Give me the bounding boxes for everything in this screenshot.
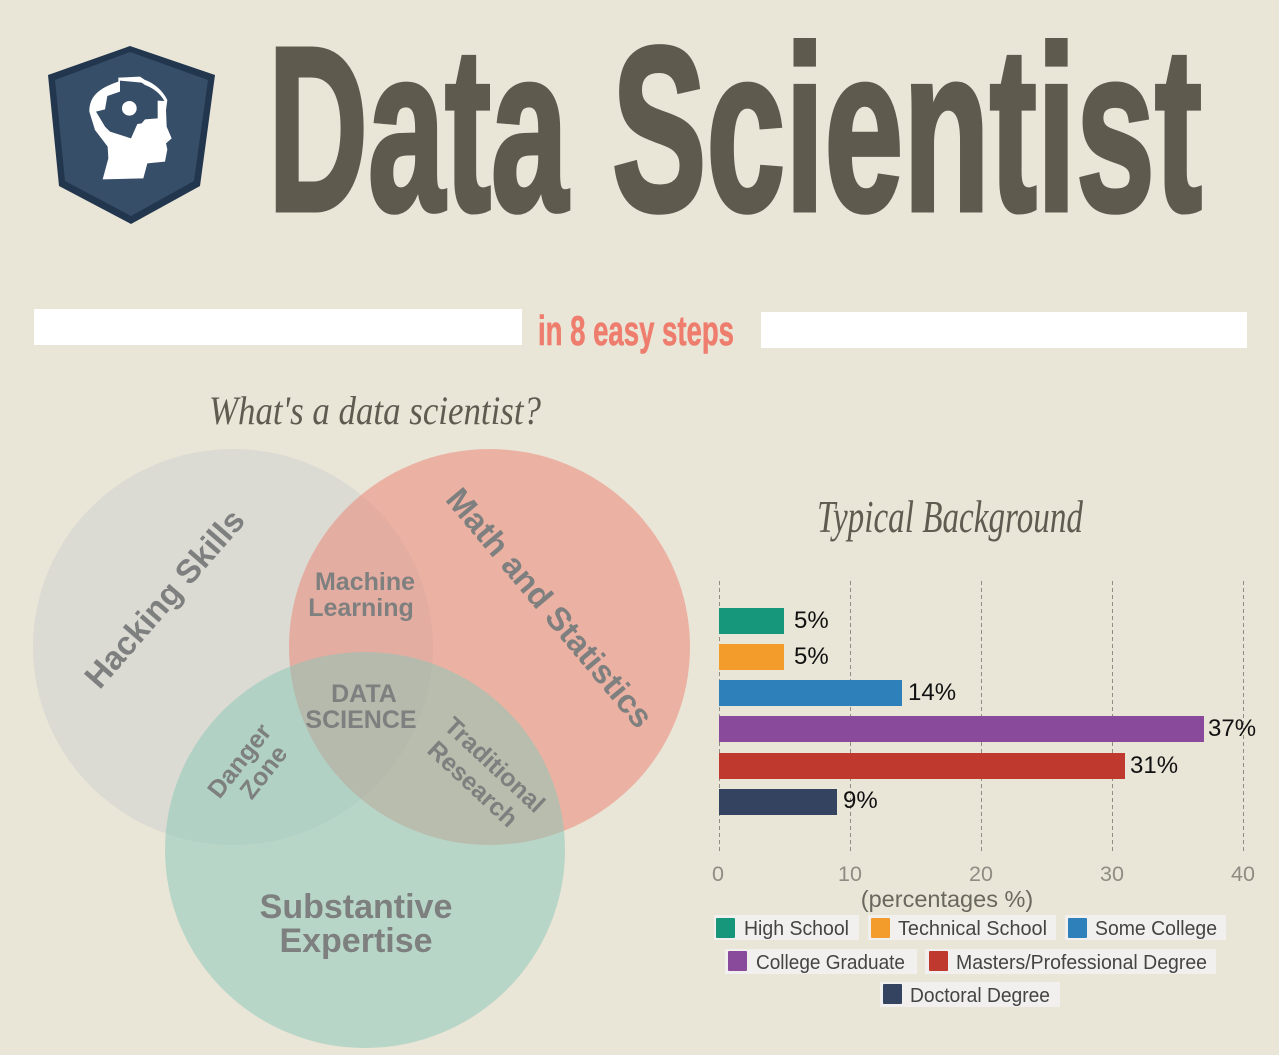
title word: Data: Data [268,0,569,260]
axis ticks: 10 [838,862,862,886]
bar: technical school: 5% [794,643,829,670]
icon: shield with head and gear [48,46,215,224]
axis ticks: 20 [969,862,993,886]
circle: substantive expertise [165,652,565,1048]
heading: typical background: Typical Background [817,492,1083,542]
legend item: high school: High School [744,917,849,940]
label: data science: DATA [331,680,397,708]
bar: doctoral degree: 9% [843,787,878,814]
bar: high school [719,607,829,634]
label: substantive expertise: Expertise [279,922,433,960]
heading: what's a data scientist: What's a data scientist? [209,388,541,433]
bar chart [712,581,1256,912]
subtitle: in 8 easy steps [538,307,734,354]
label: math and statistics: Math and Statistics [439,481,661,735]
legend item: technical school: Technical School [898,917,1047,940]
label: machine learning: Machine [315,568,415,596]
bar: high school: 5% [794,607,829,634]
axis ticks: 30 [1100,862,1124,886]
bar: technical school [719,643,829,670]
label: substantive expertise: Substantive [260,888,452,926]
legend [714,915,1226,1007]
circle: hacking skills [33,449,433,845]
bar: college graduate: 37% [1208,715,1256,742]
legend item: doctoral degree: Doctoral Degree [910,984,1050,1007]
legend item: college graduate: College Graduate [756,951,905,974]
label: danger zone: Zone [234,740,293,805]
venn diagram [33,449,690,1048]
label: data science: SCIENCE [305,706,417,734]
label: traditional research: Traditional [439,712,550,818]
axis ticks: 40 [1231,862,1255,886]
right subtitle bar [761,312,1247,348]
bar: masters/professional degree: 31% [1130,752,1178,779]
title [268,0,1202,260]
bar: college graduate [719,715,1256,742]
label: danger zone: Danger [202,719,277,804]
bar: doctoral degree [719,787,878,815]
circle: math and statistics [289,449,690,845]
axis ticks [712,862,1255,886]
label: machine learning: Learning [308,594,414,622]
bar: masters/professional degree [719,752,1178,779]
legend item: some college: Some College [1095,917,1217,940]
axis ticks: 0 [712,862,724,886]
axis title: (percentages %) [861,886,1033,912]
label: traditional research: Research [422,736,523,833]
left subtitle bar [34,309,522,345]
bar: some college [719,679,956,706]
label: hacking skills: Hacking Skills [77,502,252,695]
bar: some college: 14% [908,679,956,706]
legend item: masters/professional degree: Masters/Professional Degree [956,951,1207,974]
